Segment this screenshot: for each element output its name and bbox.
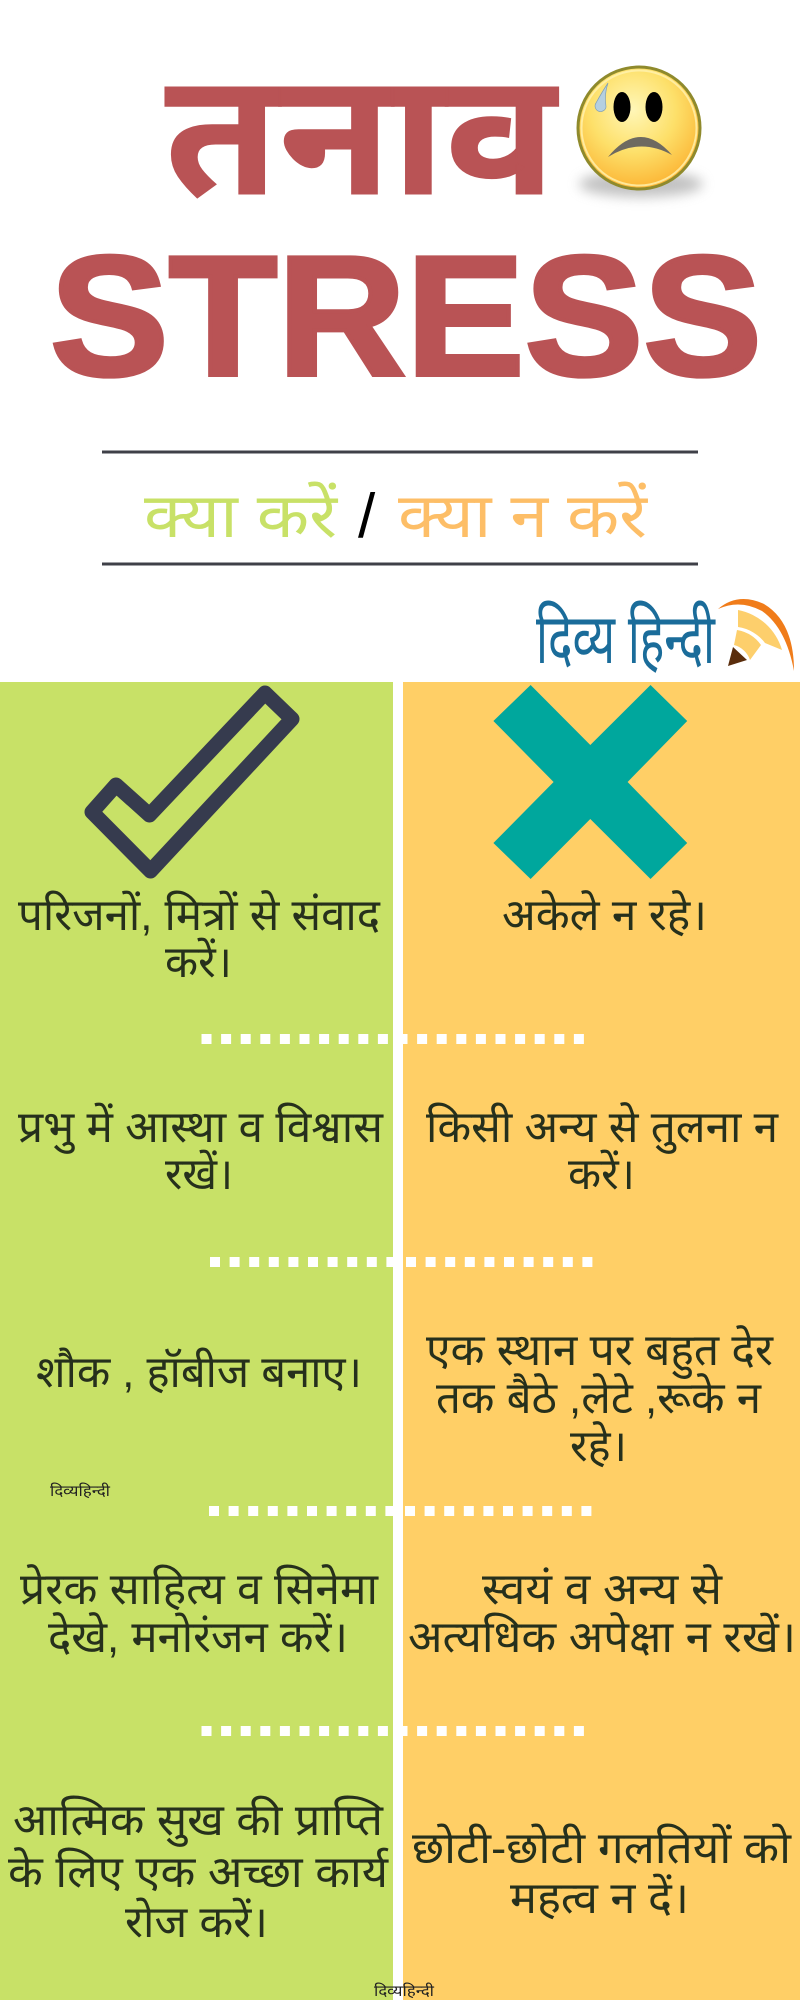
watermark left: दिव्यहिन्दी — [50, 1483, 111, 1500]
panel: don't (orange) — [403, 682, 800, 2000]
don't 3 text: एक स्थान पर बहुत देर — [426, 1324, 774, 1379]
don't 4 text: स्वयं व अन्य से — [482, 1563, 723, 1614]
do 4 text — [20, 1563, 380, 1662]
divider 3 — [209, 1506, 592, 1516]
title: STRESS: STRESS — [50, 221, 762, 412]
do 4 text: देखे, मनोरंजन करें। — [48, 1611, 348, 1662]
do 5 text: आत्मिक सुख की प्राप्ति — [13, 1795, 384, 1848]
don't 5 text: महत्व न दें। — [510, 1873, 689, 1923]
don't 3 text: तक बैठे ,लेटे ,रूके न — [436, 1372, 763, 1423]
do 1 text: परिजनों, मित्रों से संवाद — [18, 889, 381, 940]
don't 4 text — [408, 1563, 796, 1662]
icon: sad sweating face — [578, 67, 703, 197]
do 3 text: शौक , हॉबीज बनाए। — [36, 1347, 362, 1397]
divider 1 — [202, 1034, 584, 1044]
do 5 text — [8, 1795, 390, 1947]
do 2 text: प्रभु में आस्था व विश्वास — [18, 1102, 384, 1155]
do 2 text — [18, 1102, 384, 1199]
don't 2 text — [426, 1101, 780, 1199]
title: tanav: तनाव — [165, 39, 559, 231]
icon: pencil logo — [718, 599, 794, 671]
divider 4 — [202, 1726, 584, 1736]
don't 3 text: रहे। — [570, 1420, 627, 1471]
icon: check mark — [92, 693, 292, 871]
divider 2 — [210, 1257, 592, 1267]
subtitle: what to do / what not to do: क्या करें — [144, 481, 339, 551]
do 5 text: रोज करें। — [125, 1897, 268, 1947]
do 4 text: प्रेरक साहित्य व सिनेमा — [20, 1563, 380, 1614]
subtitle: what to do / what not to do: क्या न करें — [398, 481, 649, 551]
don't 5 text: छोटी-छोटी गलतियों को — [412, 1823, 793, 1873]
subtitle: what to do / what not to do — [144, 481, 649, 551]
don't 3 text — [426, 1324, 774, 1471]
do 5 text: के लिए एक अच्छा कार्य — [8, 1846, 390, 1897]
don't 5 text — [412, 1823, 793, 1923]
logo: divya hindi: दिव्य हिन्दी — [536, 600, 716, 678]
do 1 text: करें। — [165, 937, 232, 987]
panel: do (green) — [0, 682, 393, 2000]
subtitle: what to do / what not to do: / — [358, 482, 376, 551]
don't 2 text: करें। — [568, 1149, 635, 1199]
icon: cross mark — [493, 685, 687, 879]
do 2 text: रखें। — [165, 1149, 233, 1199]
do 1 text — [18, 889, 381, 987]
don't 4 text: अत्यधिक अपेक्षा न रखें। — [408, 1611, 796, 1662]
don't 1 text: अकेले न रहे। — [502, 889, 707, 940]
watermark bottom: दिव्यहिन्दी — [374, 1983, 435, 2000]
don't 2 text: किसी अन्य से तुलना न — [426, 1101, 780, 1155]
